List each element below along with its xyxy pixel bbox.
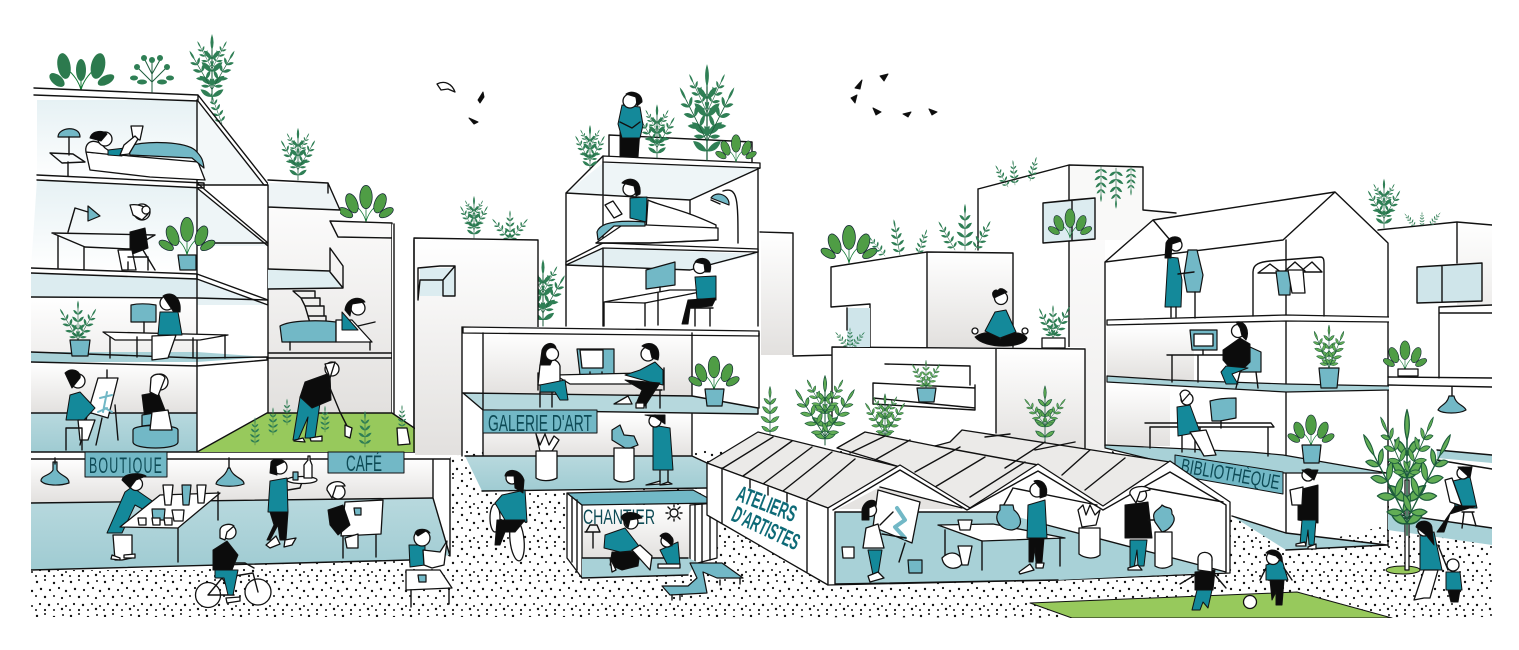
- clothes rack: [1253, 257, 1324, 316]
- sign: galerie d'art: GALERIE D'ART: [488, 410, 592, 436]
- person on teal pouf: [133, 374, 178, 448]
- sign: galerie d'art: [483, 410, 597, 436]
- building: centre wall with window: [414, 238, 538, 455]
- floor band: ground floor of left building: [31, 413, 450, 570]
- building: tower with three floors: [566, 135, 793, 356]
- cyclist with long hair: [490, 470, 527, 562]
- trees behind workshops: [761, 376, 910, 445]
- painter at easel in workshop: [842, 490, 922, 582]
- person at computer: third floor: [54, 294, 228, 360]
- sign: cafe: CAFÉ: [346, 451, 382, 476]
- sign: bibliotheque: BIBLIOTHÈQUE: [1179, 454, 1282, 494]
- cyclist in street: [196, 524, 271, 608]
- gardener on green roof with plants: [250, 362, 432, 447]
- cafe customer at table: [327, 482, 383, 558]
- sculptor and sculptures: [1078, 487, 1174, 570]
- teal zigzag board and children building: [604, 513, 743, 600]
- person reading in bed on tower: [596, 179, 738, 243]
- building: chantier container: [567, 490, 717, 578]
- building: left housing tower: [31, 88, 269, 570]
- building: house with pitched roof: [1105, 192, 1390, 550]
- roof plants: centre block: [456, 196, 588, 327]
- children playing with ball: [1180, 550, 1292, 610]
- potter with vase and table: [938, 480, 1065, 574]
- sign: boutique: [85, 452, 167, 478]
- person reading newspaper at terrace: [406, 529, 452, 607]
- shop assistant and ceramics table: [107, 474, 220, 562]
- building: right white blocks: [793, 165, 1176, 452]
- balcony with plant: [873, 360, 1070, 442]
- painter and easel: [65, 370, 118, 450]
- building: galerie d'art: [462, 327, 793, 491]
- sign: bibliotheque: [1175, 454, 1283, 494]
- potted plant in house: [1286, 415, 1336, 463]
- sculptures and visitor: [536, 415, 673, 485]
- icon: lamp and person reading in bed: [50, 126, 205, 180]
- hanging lamps: [41, 458, 244, 486]
- woman at desk, third floor of house: [1145, 390, 1274, 456]
- workshops: atelier d'artistes: [707, 430, 1230, 585]
- two people at shared desk: [538, 343, 664, 408]
- sign: ateliers d'artistes: [728, 480, 804, 555]
- grass field: [1030, 592, 1392, 618]
- birds, right sky: [851, 74, 937, 117]
- sign: ateliers d'artistes: ATELIERS: [733, 480, 800, 527]
- woman with mannequin: [1165, 237, 1203, 318]
- birds, centre sky: [437, 82, 484, 124]
- building: far right block: [1378, 222, 1492, 545]
- plants: right terraces: [819, 156, 1136, 349]
- plants: roof of far right block: [1363, 179, 1466, 413]
- roof plants: left building: [47, 34, 395, 222]
- sign: ateliers d'artistes: D'ARTISTES: [728, 501, 804, 555]
- rooftop plants and standing man: [571, 64, 758, 170]
- street tree: [1351, 410, 1463, 574]
- man at computer, second floor of house: [1167, 322, 1261, 388]
- sign: boutique: BOUTIQUE: [89, 453, 163, 478]
- waiter with tray: [266, 456, 317, 548]
- man at desk on tower: [604, 258, 716, 326]
- pot plant on gallery floor: [687, 356, 741, 406]
- person lying on bed reading: [280, 298, 375, 350]
- standing reader under house: [1290, 469, 1318, 549]
- person at desk: second floor: [52, 204, 217, 270]
- seated man drawing, far right: [1437, 467, 1477, 532]
- mother and child: [1414, 521, 1462, 602]
- building: chantier container: CHANTIER: [583, 506, 655, 529]
- ground: stippled pavement: [31, 450, 1492, 618]
- palm in pot: [1307, 325, 1351, 388]
- building: second block with stairs: [268, 180, 414, 452]
- person meditating: [972, 289, 1076, 348]
